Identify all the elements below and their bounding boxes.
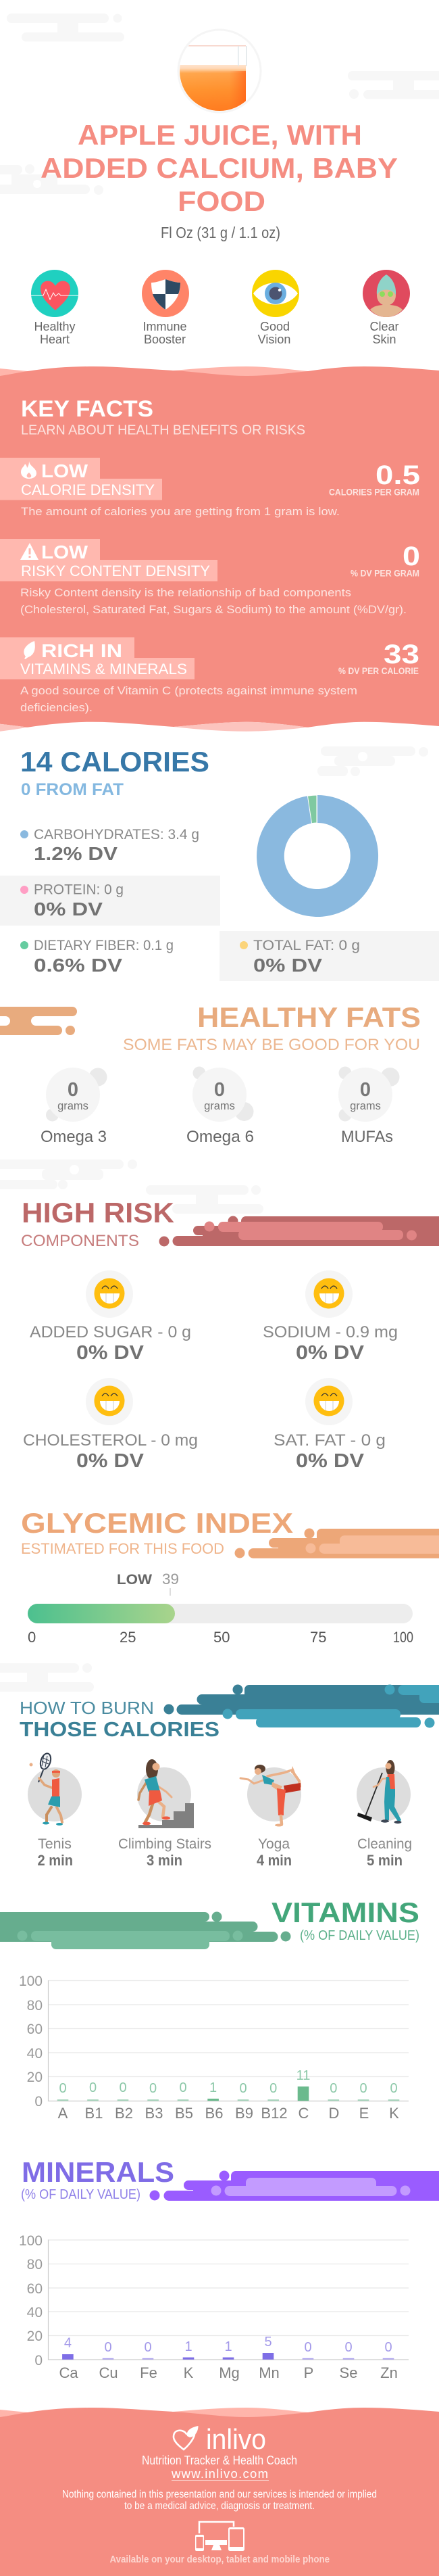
title: ADDED CALCIUM, BABY xyxy=(41,152,398,184)
heading: healthy fats xyxy=(123,1001,421,1054)
activity: cleaning xyxy=(357,1760,412,1869)
macro: total fat: TOTAL FAT: 0 g xyxy=(253,938,360,953)
icon: grinning face xyxy=(95,1386,124,1416)
activity: yoga: Yoga xyxy=(258,1836,290,1852)
title: FOOD xyxy=(178,185,265,217)
title: APPLE JUICE, WITH xyxy=(78,119,362,151)
bar chart: vitamins: 0 xyxy=(89,2080,97,2095)
heading: how to burn: HOW TO BURN xyxy=(20,1698,154,1718)
macro: total fat xyxy=(220,931,439,981)
icon: healthy heart xyxy=(31,270,78,346)
heading: calories xyxy=(20,746,209,799)
heading: healthy fats: SOME FATS MAY BE GOOD FOR YOU xyxy=(123,1036,420,1054)
bar chart: vitamins: 0 xyxy=(119,2080,127,2095)
bar chart: minerals: Ca xyxy=(59,2364,78,2381)
macro: dietary fiber: DIETARY FIBER: 0.1 g xyxy=(34,938,174,953)
activity: yoga: 4 min xyxy=(257,1852,292,1869)
item: added sugar: 0% DV xyxy=(76,1342,145,1364)
panel: healthy fats xyxy=(0,1001,421,1146)
panel: glycemic index xyxy=(21,1507,439,1646)
bar chart: minerals: Fe xyxy=(140,2364,157,2381)
activity: tennis: Tenis xyxy=(38,1836,72,1852)
bar chart: vitamins: 60 xyxy=(27,2022,43,2037)
bar chart: vitamins: B5 xyxy=(175,2105,193,2122)
bar chart: vitamins: D xyxy=(329,2105,339,2122)
fact: risky content density: LOW xyxy=(41,542,88,563)
icon: good vision: Vision xyxy=(258,333,290,346)
panel: high risk xyxy=(21,1197,439,1472)
bar chart: vitamins: 0 xyxy=(34,2094,43,2109)
fact: risky content density: 0 xyxy=(403,542,420,571)
logo: inlivo xyxy=(174,2423,266,2455)
heading: calories: 0 FROM FAT xyxy=(21,780,124,799)
macro: protein: 0% DV xyxy=(34,899,103,920)
bar chart: minerals: Se xyxy=(340,2364,357,2381)
fact: rich in vitamins and minerals: deficiencies). xyxy=(20,701,93,714)
heading: glycemic index: GLYCEMIC INDEX xyxy=(21,1507,293,1539)
icon: warning triangle xyxy=(20,543,38,560)
activity: cleaning: 5 min xyxy=(367,1852,403,1869)
bar chart: minerals: 40 xyxy=(27,2305,43,2320)
bar chart: vitamins: 20 xyxy=(27,2070,43,2085)
heading: how to burn: THOSE CALORIES xyxy=(20,1717,220,1741)
icon: immune booster: Booster xyxy=(144,333,186,346)
macro: carbohydrates: CARBOHYDRATES: 3.4 g xyxy=(34,827,199,842)
icon: immune booster: Immune xyxy=(143,320,187,333)
stat: omega 3 xyxy=(41,1068,107,1146)
gauge: glycemic index value 39: 100 xyxy=(393,1629,413,1646)
icon: healthy heart: Heart xyxy=(40,333,70,346)
item: saturated fat: 0% DV xyxy=(296,1450,365,1472)
item: saturated fat: SAT. FAT - 0 g xyxy=(274,1431,386,1450)
macro: protein xyxy=(0,876,220,926)
bar chart: vitamins: B9 xyxy=(235,2105,253,2122)
heading: vitamins xyxy=(272,1897,419,1943)
heading: high risk xyxy=(21,1197,174,1250)
bar chart: minerals: 0 xyxy=(144,2340,152,2355)
icon: good vision xyxy=(252,270,299,346)
panel: vitamins xyxy=(0,1897,419,2122)
panel: calories xyxy=(0,746,439,981)
bar chart: minerals: 0 xyxy=(304,2340,312,2355)
item: cholesterol: CHOLESTEROL - 0 mg xyxy=(23,1431,198,1450)
bar chart: minerals: Mn xyxy=(259,2364,280,2381)
decoration: red bars xyxy=(159,1216,439,1247)
icon: grinning face xyxy=(313,1278,344,1309)
bar chart: vitamins: 80 xyxy=(27,1998,43,2013)
gauge: glycemic index value 39: 50 xyxy=(213,1629,230,1646)
fact: calorie density: CALORIE DENSITY xyxy=(21,481,155,498)
availability note: Available on your desktop, tablet and mobile phone xyxy=(109,2554,330,2565)
heading: minerals: (% OF DAILY VALUE) xyxy=(21,2187,140,2202)
stat: omega 6 xyxy=(186,1067,254,1146)
bar chart: minerals: 0 xyxy=(34,2353,43,2368)
item: sodium: SODIUM - 0.9 mg xyxy=(263,1323,398,1341)
fact: calorie density: 0.5 xyxy=(376,460,420,490)
fact: rich in vitamins and minerals: RICH IN xyxy=(41,640,122,661)
bar chart: vitamins: 0 xyxy=(239,2081,247,2096)
gauge: glycemic index value 39: 0 xyxy=(28,1629,36,1646)
disclaimer: to be a medical advice, diagnosis or treatment. xyxy=(124,2500,315,2512)
item: added sugar xyxy=(30,1270,191,1364)
panel: footer xyxy=(0,2408,439,2576)
icon: immune booster xyxy=(142,270,189,346)
bar chart: minerals: 0 xyxy=(104,2340,112,2355)
gauge: glycemic index value 39: 39 xyxy=(162,1571,179,1588)
heading: minerals xyxy=(21,2156,174,2202)
item: added sugar: ADDED SUGAR - 0 g xyxy=(30,1323,191,1341)
bar chart: vitamins: 0 xyxy=(330,2081,337,2096)
macro: dietary fiber xyxy=(20,938,174,976)
heading: vitamins: (% OF DAILY VALUE) xyxy=(300,1928,419,1943)
activity: climbing stairs: Climbing Stairs xyxy=(118,1836,211,1852)
fact: rich in vitamins and minerals: % DV PER CALORIE xyxy=(338,665,419,676)
decoration: orange bars xyxy=(0,1007,77,1035)
stat: omega 6: grams xyxy=(204,1100,235,1112)
decoration: orange bars xyxy=(235,1528,439,1558)
bar chart: minerals: 0 xyxy=(344,2340,353,2355)
bar chart: minerals: 4 xyxy=(64,2336,72,2351)
fact: risky content density: (Cholesterol, Saturated Fat, Sugars & Sodium) to the amount (%DV/gr). xyxy=(20,603,407,616)
fact: risky content density: RISKY CONTENT DENSITY xyxy=(21,563,210,579)
icon: grinning face xyxy=(313,1386,344,1416)
bar chart: vitamins: 0 xyxy=(390,2081,398,2096)
item: sodium: 0% DV xyxy=(296,1342,365,1364)
icon: devices xyxy=(195,2522,244,2551)
fact: risky content density xyxy=(0,539,420,616)
icon: flame xyxy=(21,461,36,479)
fact: calorie density: The amount of calories you are getting from 1 gram is low. xyxy=(21,505,340,518)
stat: omega 6: Omega 6 xyxy=(186,1128,254,1146)
fact: risky content density: Risky Content density is the relationship of bad components xyxy=(20,586,351,599)
heading: glycemic index xyxy=(21,1507,293,1557)
logo: inlivo: inlivo xyxy=(206,2423,266,2455)
activity: tennis: 2 min xyxy=(38,1852,73,1869)
disclaimer: Nothing contained in this presentation and our services is intended or implied xyxy=(62,2489,377,2500)
panel: how to burn those calories xyxy=(20,1685,439,1869)
hero food image: glass of juice xyxy=(178,30,261,114)
tagline and website xyxy=(142,2454,297,2481)
item: cholesterol: 0% DV xyxy=(76,1450,145,1472)
bar chart: vitamins: 0 xyxy=(149,2081,157,2096)
tagline and website: www.inlivo.com xyxy=(171,2466,268,2481)
bar chart: vitamins: 0 xyxy=(179,2080,187,2095)
bar chart: minerals: 0 xyxy=(384,2340,392,2355)
benefit icons row xyxy=(31,270,410,346)
bar chart: vitamins: B1 xyxy=(85,2105,103,2122)
serving size: Fl Oz (31 g / 1.1 oz) xyxy=(161,224,280,241)
bar chart: vitamins: K xyxy=(389,2105,399,2122)
activity: climbing stairs: 3 min xyxy=(147,1852,182,1869)
heading: minerals: MINERALS xyxy=(22,2156,174,2188)
bar chart: vitamins: 0 xyxy=(359,2081,367,2096)
heading: healthy fats: HEALTHY FATS xyxy=(197,1001,421,1033)
heading: glycemic index: ESTIMATED FOR THIS FOOD xyxy=(21,1540,224,1557)
fact: risky content density: % DV PER GRAM xyxy=(351,568,419,579)
bar chart: vitamins: E xyxy=(359,2105,369,2122)
heading: key facts xyxy=(21,396,305,438)
heading: high risk: HIGH RISK xyxy=(22,1197,174,1229)
fact: rich in vitamins and minerals: 33 xyxy=(384,640,419,669)
activity: cleaning: Cleaning xyxy=(357,1836,412,1852)
bar chart: vitamins xyxy=(19,1974,409,2122)
bar chart: vitamins: 0 xyxy=(59,2081,67,2096)
disclaimer xyxy=(62,2489,377,2512)
title xyxy=(41,119,398,217)
gauge: glycemic index value 39: 25 xyxy=(120,1629,136,1646)
fact: rich in vitamins and minerals xyxy=(0,637,419,714)
bar chart: minerals xyxy=(19,2233,409,2381)
heading: how to burn xyxy=(20,1698,220,1741)
bar chart: vitamins: B3 xyxy=(145,2105,163,2122)
stat: omega 3: 0 xyxy=(68,1079,78,1101)
decoration: purple bars xyxy=(150,2170,439,2201)
macro: total fat: 0% DV xyxy=(253,955,322,976)
bar chart: vitamins: 0 xyxy=(269,2081,277,2096)
macro: carbohydrates xyxy=(20,827,199,864)
heading: key facts: LEARN ABOUT HEALTH BENEFITS OR RISKS xyxy=(21,422,305,438)
bar chart: vitamins: B2 xyxy=(115,2105,133,2122)
bar chart: vitamins: A xyxy=(58,2105,68,2122)
panel: minerals xyxy=(19,2156,439,2381)
bar chart: vitamins: 11 xyxy=(296,2068,310,2083)
fact: rich in vitamins and minerals: VITAMINS & MINERALS xyxy=(20,661,187,677)
bar chart: vitamins: 1 xyxy=(209,2080,217,2095)
activity: tennis xyxy=(28,1752,82,1869)
stat: omega 3: grams xyxy=(57,1100,88,1112)
icon: healthy heart: Healthy xyxy=(34,320,76,333)
bar chart: minerals: 1 xyxy=(224,2339,232,2354)
bar chart: minerals: P xyxy=(304,2364,313,2381)
fact: calorie density: LOW xyxy=(41,460,88,481)
item: saturated fat xyxy=(274,1378,386,1472)
stat: omega 3: Omega 3 xyxy=(41,1128,107,1146)
bar chart: vitamins: C xyxy=(299,2105,309,2122)
stat: MUFAs: MUFAs xyxy=(341,1128,393,1146)
background clouds xyxy=(0,14,439,1692)
stat: MUFAs: grams xyxy=(350,1100,381,1112)
bar chart: vitamins: 40 xyxy=(27,2046,43,2061)
donut chart xyxy=(257,795,378,917)
bar chart: minerals: Zn xyxy=(380,2364,398,2381)
decoration: green bars xyxy=(0,1912,290,1949)
bar chart: vitamins: B6 xyxy=(205,2105,223,2122)
stat: MUFAs: 0 xyxy=(360,1079,371,1101)
bar chart: minerals: 60 xyxy=(27,2281,43,2297)
macro: carbohydrates: 1.2% DV xyxy=(34,843,118,864)
macro: protein: PROTEIN: 0 g xyxy=(34,882,124,898)
fact: calorie density xyxy=(0,458,420,518)
stat: MUFAs xyxy=(338,1067,400,1146)
icon: clear skin: Clear xyxy=(369,320,399,333)
icon: clear skin xyxy=(363,270,410,346)
gauge: glycemic index value 39: LOW xyxy=(117,1571,153,1588)
icon: grinning face xyxy=(95,1278,124,1309)
bar chart: minerals: 100 xyxy=(19,2233,43,2249)
tagline and website: Nutrition Tracker & Health Coach xyxy=(142,2454,297,2467)
fact: rich in vitamins and minerals: A good source of Vitamin C (protects against immune system xyxy=(20,684,357,697)
gauge: glycemic index value 39: 75 xyxy=(310,1629,326,1646)
heading: calories: 14 CALORIES xyxy=(20,746,209,778)
icon: good vision: Good xyxy=(260,320,290,333)
item: sodium xyxy=(263,1270,398,1364)
bar chart: vitamins: 100 xyxy=(19,1974,43,1989)
heading: high risk: COMPONENTS xyxy=(21,1232,139,1250)
bar chart: minerals: 20 xyxy=(27,2329,43,2344)
stat: omega 6: 0 xyxy=(214,1079,225,1101)
decoration: teal bars xyxy=(163,1685,439,1728)
gauge: glycemic index value 39 xyxy=(28,1571,413,1646)
bar chart: minerals: 1 xyxy=(184,2339,192,2354)
bar chart: minerals: K xyxy=(184,2364,194,2381)
heading: key facts: KEY FACTS xyxy=(21,396,153,422)
bar chart: minerals: 80 xyxy=(27,2257,43,2272)
icon: clear skin: Skin xyxy=(372,333,396,346)
heading: vitamins: VITAMINS xyxy=(272,1897,419,1928)
bar chart: minerals: Mg xyxy=(219,2364,240,2381)
activity: yoga xyxy=(240,1765,301,1869)
activity: climbing stairs xyxy=(118,1759,211,1869)
panel: key facts xyxy=(0,366,439,732)
macro: dietary fiber: 0.6% DV xyxy=(34,955,122,976)
item: cholesterol xyxy=(23,1378,198,1472)
fact: calorie density: CALORIES PER GRAM xyxy=(329,487,419,498)
bar chart: vitamins: B12 xyxy=(261,2105,288,2122)
bar chart: minerals: Cu xyxy=(99,2364,118,2381)
icon: leaf xyxy=(24,641,35,659)
bar chart: minerals: 5 xyxy=(264,2335,272,2350)
